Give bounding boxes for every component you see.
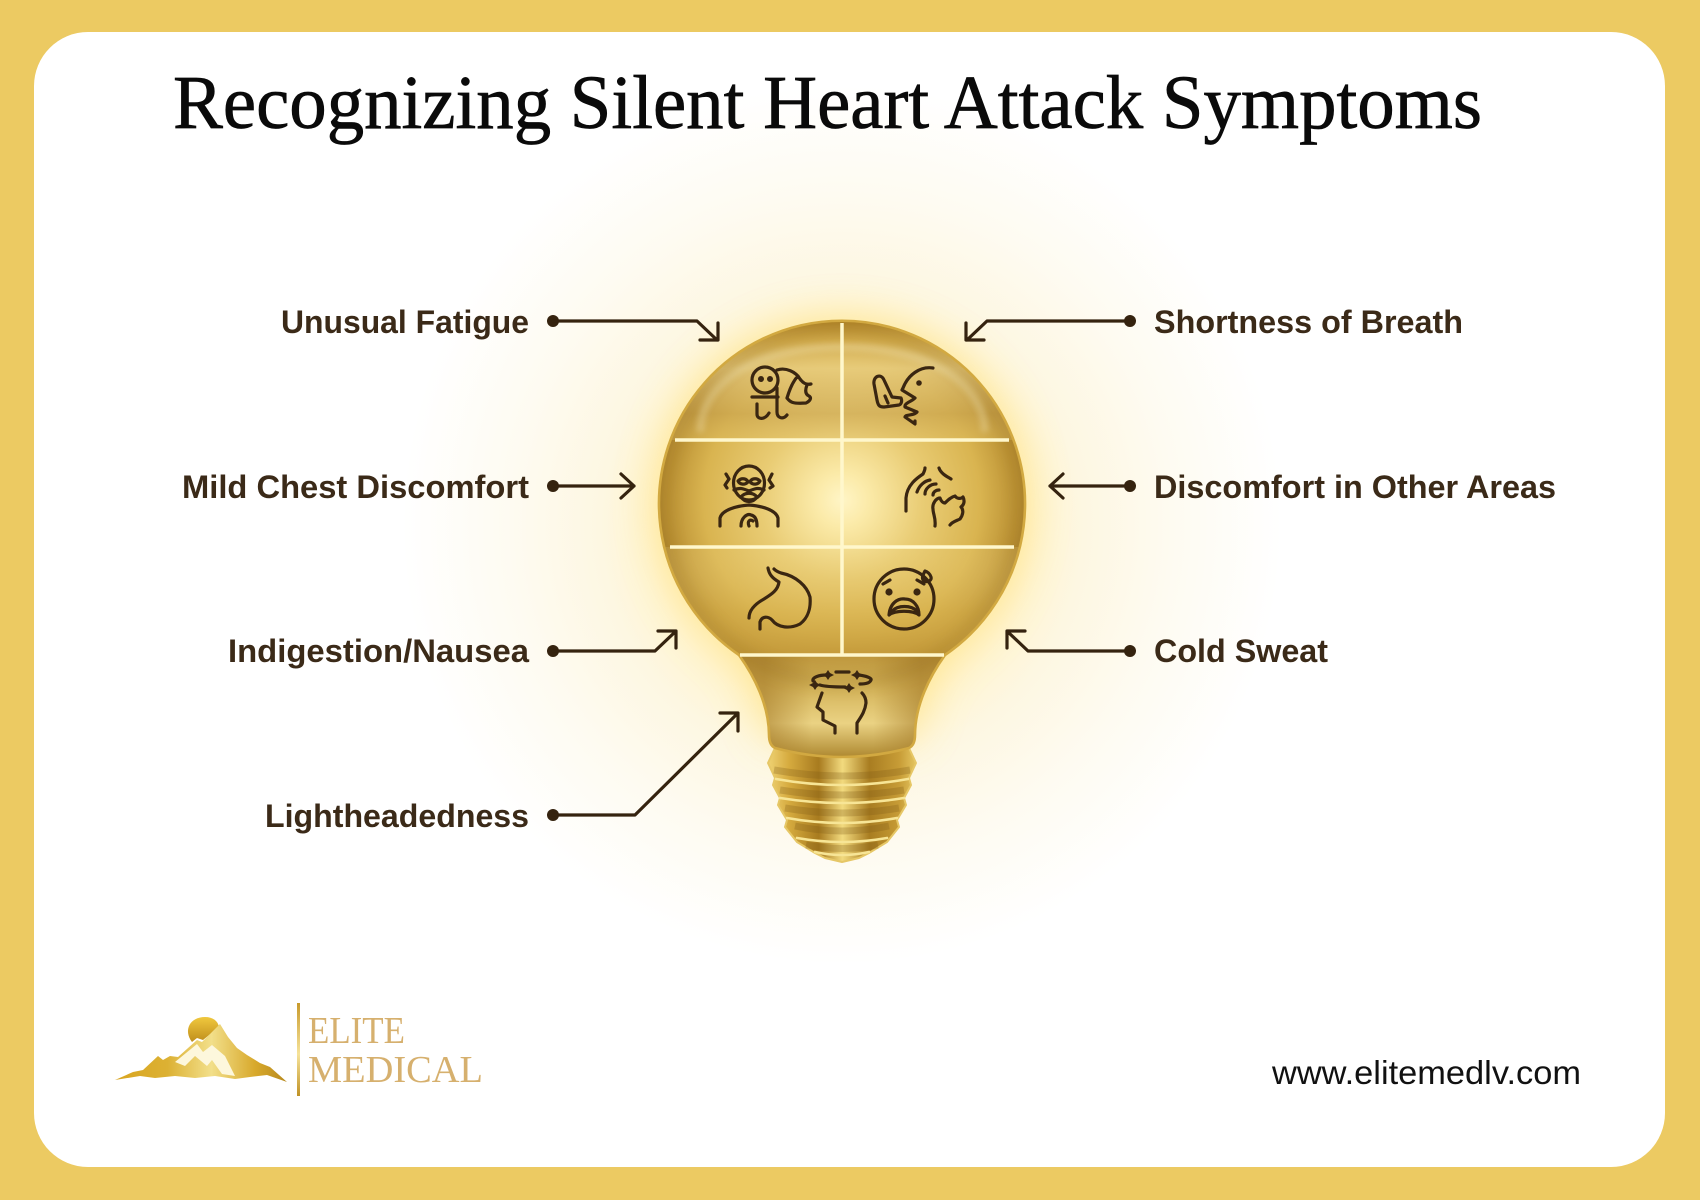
website url: www.elitemedlv.com (1271, 1054, 1581, 1091)
arrow: Cold Sweat (1007, 631, 1136, 657)
icon: stomach (749, 568, 810, 629)
logo wordmark: MEDICAL: MEDICAL (308, 1049, 483, 1091)
light bulb illustration (650, 315, 1035, 862)
arrow: Mild Chest Discomfort (547, 474, 634, 498)
arrow: Indigestion/Nausea (547, 631, 676, 657)
arrow: Discomfort in Other Areas (1050, 474, 1136, 498)
label: Discomfort in Other Areas: Discomfort in Other Areas (1154, 469, 1556, 505)
title: Recognizing Silent Heart Attack Symptoms (173, 61, 1482, 145)
label: Lightheadedness: Lightheadedness (265, 798, 529, 834)
logo mountains (115, 1024, 287, 1082)
label: Indigestion/Nausea: Indigestion/Nausea (228, 633, 529, 669)
screw base (768, 748, 916, 862)
arrow: Unusual Fatigue (547, 315, 718, 340)
label: Shortness of Breath: Shortness of Breath (1154, 304, 1463, 340)
icon: chest discomfort (720, 466, 778, 526)
icon: fatigue (752, 367, 811, 418)
bulb dividers (670, 323, 1014, 655)
bulb glass body (650, 315, 1035, 770)
glow background behind bulb (402, 85, 1282, 965)
logo divider bar (297, 1003, 300, 1096)
arrow: Lightheadedness (547, 713, 738, 821)
logo snow highlights (175, 1044, 235, 1076)
logo: Elite Medical (115, 1003, 483, 1096)
icon: dizzy head (809, 670, 871, 733)
symptom icons (720, 367, 964, 733)
logo sun (188, 1017, 219, 1042)
icon: cold sweat face (874, 569, 934, 629)
bulb outline (659, 321, 1025, 757)
icon: pain in other areas (906, 468, 964, 526)
icon: inhaler and breath (874, 368, 933, 424)
label: Cold Sweat: Cold Sweat (1154, 633, 1328, 669)
arrow: Shortness of Breath (966, 315, 1136, 340)
label: Unusual Fatigue: Unusual Fatigue (281, 304, 529, 340)
logo wordmark: ELITE: ELITE (308, 1010, 405, 1052)
label: Mild Chest Discomfort: Mild Chest Discomfort (182, 469, 529, 505)
